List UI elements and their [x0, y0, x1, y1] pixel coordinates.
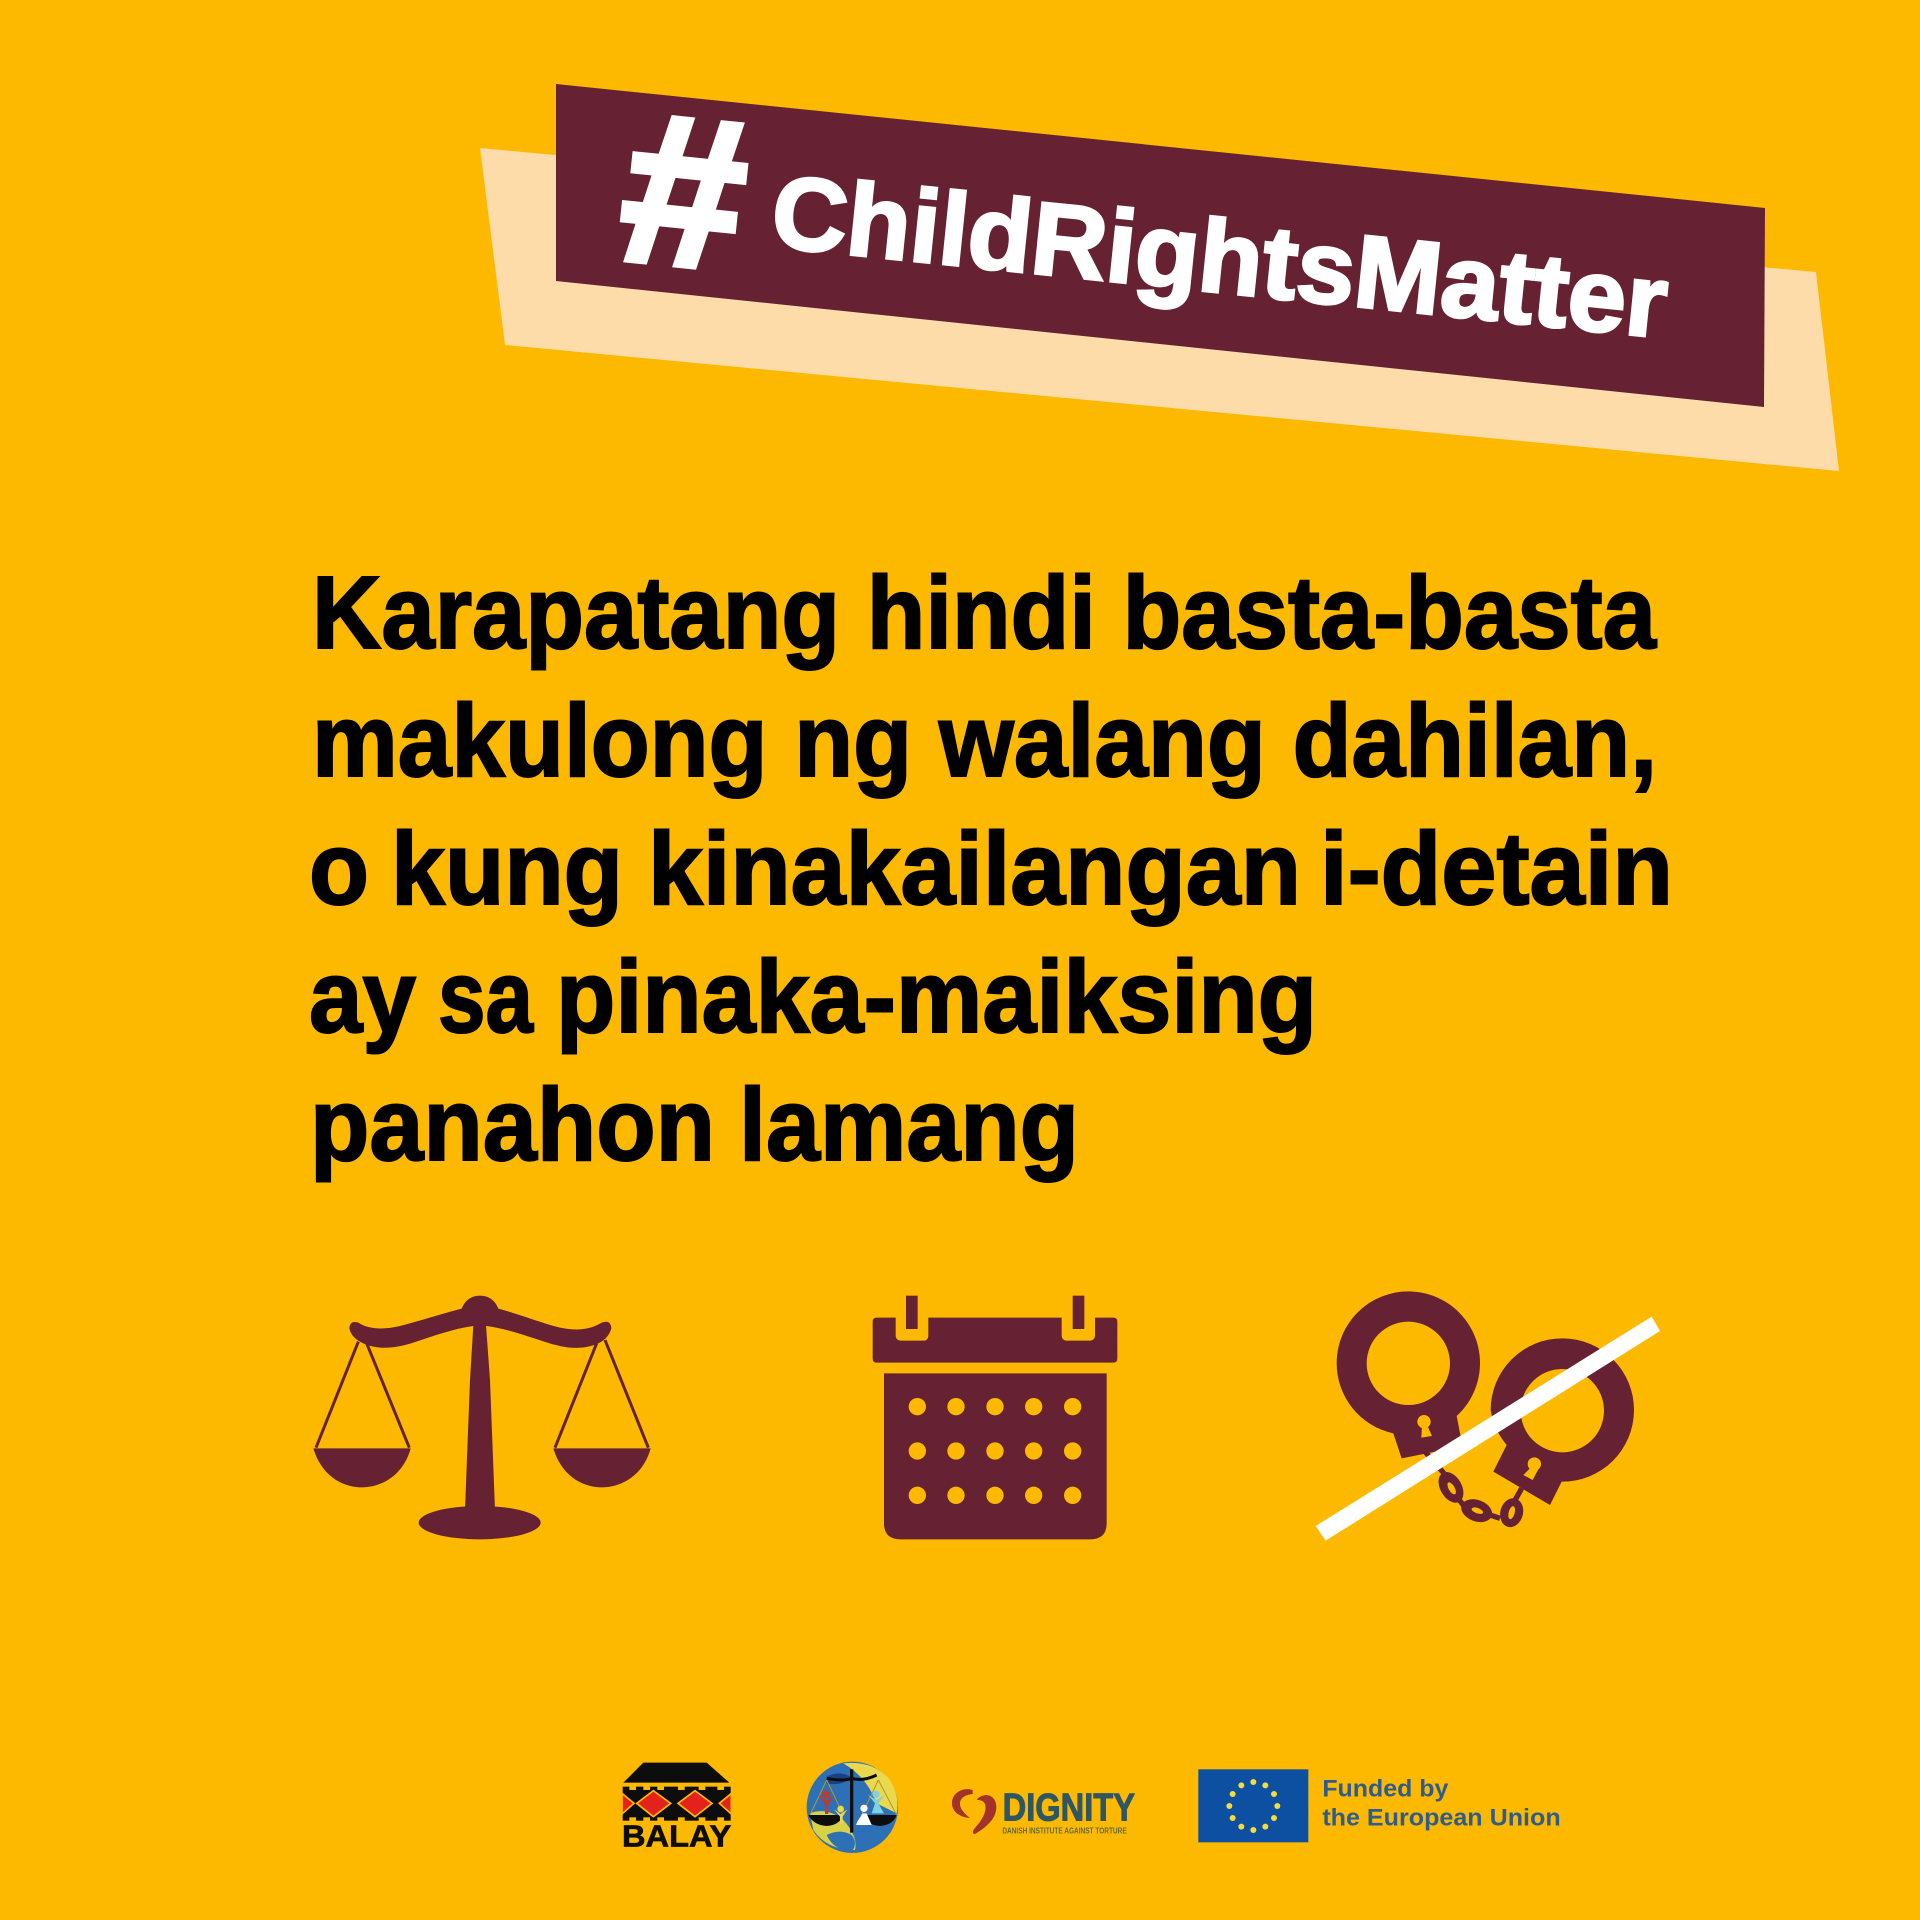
main heading: [309, 555, 1673, 1182]
hashtag text: ChildRightsMatter: [767, 153, 1673, 360]
EU text: the European Union: [1322, 1805, 1561, 1832]
Dignity heart mark: [952, 1789, 996, 1834]
heading line 5: [310, 1067, 1079, 1182]
hashtag banner: [480, 67, 1839, 471]
heading line 1: Karapatang hindi basta-basta: [312, 555, 1657, 670]
heading line 4: sa: [438, 939, 534, 1054]
icon: calendar: [873, 1296, 1117, 1539]
logo: EU funding: [1198, 1769, 1561, 1842]
heading line 3: [309, 811, 1673, 926]
heading line 3: kinakailangan: [648, 811, 1301, 926]
heading line 3: o: [309, 811, 369, 926]
logo: globe with scales: [807, 1762, 898, 1853]
banner cream backing: [480, 148, 1839, 471]
Balay wordmark: BALAY: [622, 1820, 731, 1854]
icon: scales of justice: [313, 1296, 651, 1539]
logo: Balay: [622, 1763, 731, 1854]
heading line 3: i-detain: [1320, 811, 1673, 926]
EU flag: [1198, 1769, 1308, 1842]
banner maroon panel: [556, 84, 1765, 407]
heading line 5: panahon: [310, 1067, 715, 1182]
heading line 4: ay: [309, 939, 416, 1054]
heading line 4: pinaka-maiksing: [556, 939, 1317, 1054]
logo: Dignity: [952, 1786, 1135, 1835]
icon: crossed-out handcuffs: [1316, 1291, 1660, 1541]
Dignity wordmark: DIGNITY: [1003, 1786, 1135, 1830]
EU text: [1322, 1776, 1561, 1832]
heading line 5: lamang: [739, 1067, 1079, 1182]
Dignity tagline: DANISH INSTITUTE AGAINST TORTURE: [1002, 1826, 1127, 1835]
heading line 2: makulong ng walang dahilan,: [312, 683, 1657, 798]
hash symbol: #: [611, 67, 757, 315]
heading line 3: kung: [391, 811, 623, 926]
EU text: Funded by: [1322, 1776, 1449, 1803]
